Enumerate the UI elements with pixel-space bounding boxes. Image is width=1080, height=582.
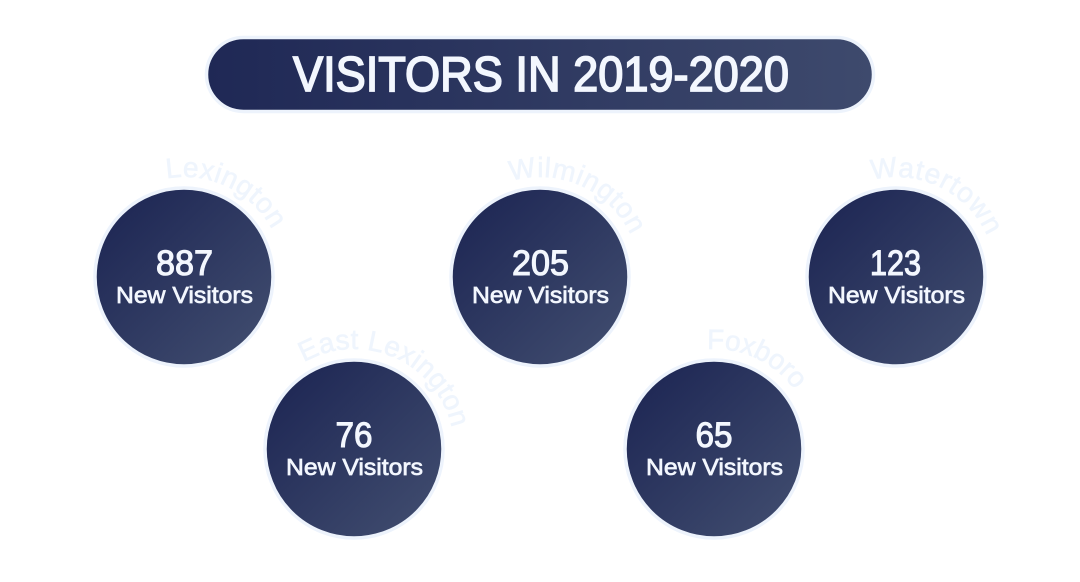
caption: New Visitors: New Visitors	[828, 282, 965, 308]
panel: East Lexington	[263, 330, 466, 540]
title text: VISITORS IN 2019-2020	[293, 48, 789, 102]
value: 65: 65	[696, 416, 732, 455]
title pill	[206, 38, 874, 112]
panel: Lexington	[93, 158, 282, 368]
value: 887: 887	[156, 244, 213, 283]
panel: Wilmington	[449, 156, 642, 368]
panel: Foxboro	[623, 330, 805, 540]
caption: New Visitors: New Visitors	[646, 454, 783, 480]
caption: New Visitors: New Visitors	[286, 454, 423, 480]
location label: East Lexington: East Lexington	[298, 330, 466, 426]
value: 123: 123	[870, 244, 921, 283]
caption: New Visitors: New Visitors	[472, 282, 609, 308]
location label: Foxboro: Foxboro	[709, 330, 804, 387]
caption: New Visitors: New Visitors	[116, 282, 253, 308]
location label: Watertown: Watertown	[869, 156, 998, 234]
location label: Lexington: Lexington	[166, 158, 282, 228]
panel: Watertown	[805, 156, 998, 368]
value: 76: 76	[336, 416, 372, 455]
value: 205: 205	[512, 244, 569, 283]
location label: Wilmington: Wilmington	[507, 156, 642, 234]
